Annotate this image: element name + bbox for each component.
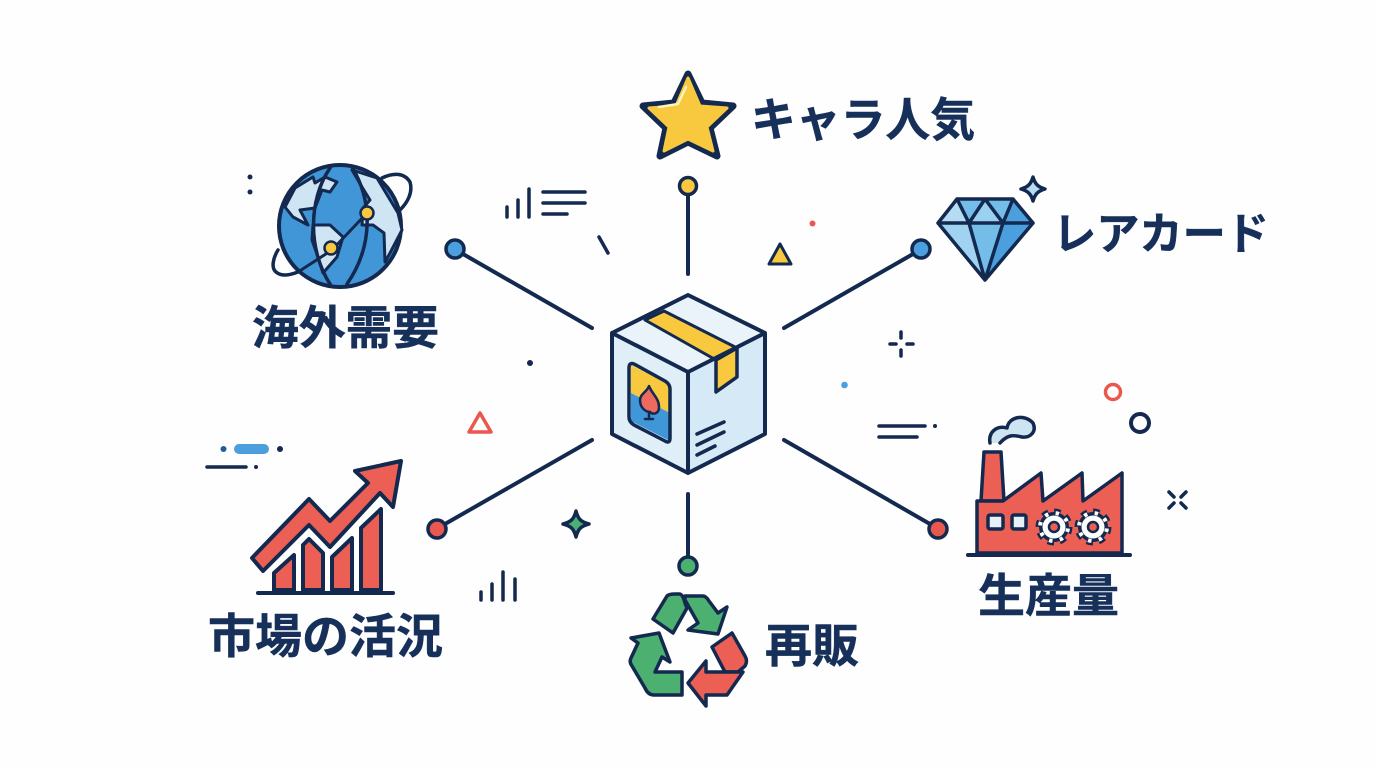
heading: rare card: レアカード — [1053, 210, 1269, 259]
icon: factory — [968, 417, 1130, 555]
node: star — [680, 178, 696, 194]
icon: globe — [273, 165, 411, 287]
node: chart — [428, 520, 446, 538]
node: recycle — [679, 557, 697, 575]
node: factory — [929, 520, 947, 538]
icon: diamond — [938, 177, 1045, 280]
heading: production volume: 生産量 — [978, 570, 1119, 622]
icon: market chart — [252, 461, 401, 593]
icon: recycle — [630, 594, 746, 706]
decorative accents — [207, 174, 1186, 600]
node: diamond — [912, 240, 930, 258]
heading: character popularity: キャラ人気 — [751, 94, 975, 146]
heading: overseas demand: 海外需要 — [252, 302, 439, 354]
node: globe — [446, 240, 464, 258]
connector lines — [445, 195, 930, 557]
heading: market conditions: 市場の活況 — [208, 610, 443, 663]
icon: star — [643, 74, 733, 156]
icon: central card box — [612, 295, 765, 473]
heading: resale: 再販 — [765, 620, 859, 672]
